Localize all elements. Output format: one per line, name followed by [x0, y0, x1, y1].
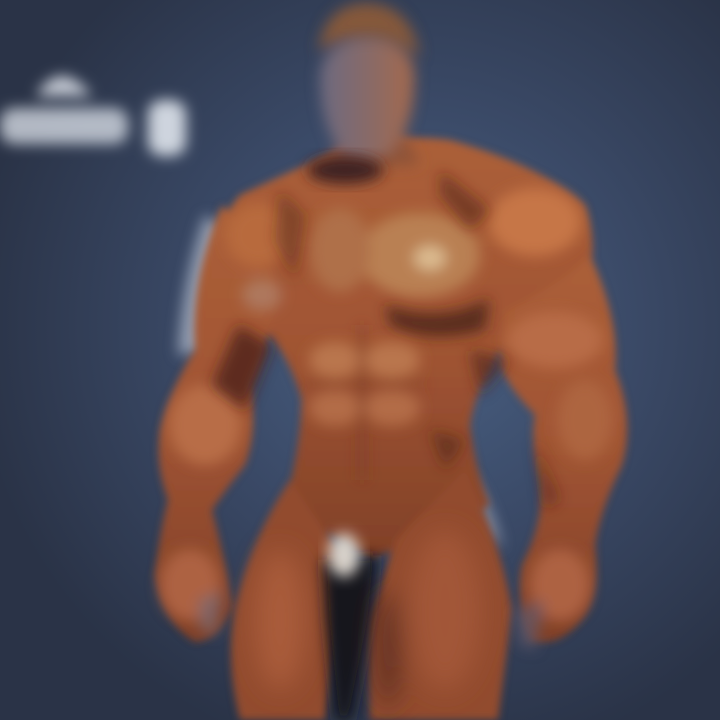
- leg shading: [254, 530, 481, 710]
- muscle shadows: [212, 170, 560, 510]
- neck shadow: [307, 156, 383, 184]
- halo: pale rim beside the left arm: [178, 215, 503, 550]
- body silhouette: [155, 138, 627, 720]
- shorts: dark garment with a light panel: [322, 533, 378, 720]
- logo blob: blurred white mark at top left: [0, 76, 186, 156]
- abdominal muscles: [305, 325, 425, 480]
- chest highlights: [169, 188, 613, 465]
- torso: [215, 138, 593, 560]
- head: [318, 3, 420, 170]
- figure: [155, 3, 627, 720]
- left leg: [231, 480, 345, 720]
- right leg: [370, 470, 512, 720]
- left arm: [155, 205, 278, 642]
- right arm: [500, 255, 627, 642]
- hands: knuckle detail: [160, 549, 590, 650]
